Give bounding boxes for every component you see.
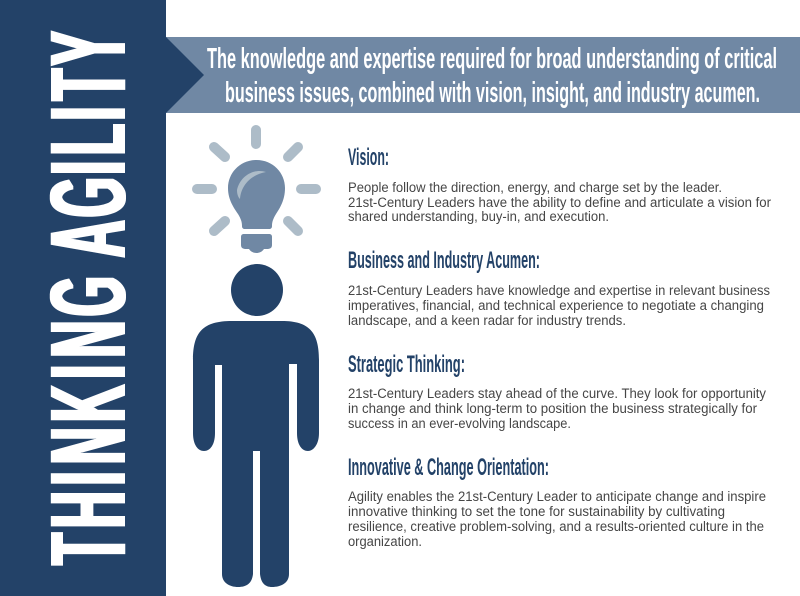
body: Strategic Thinking: success in an ever-evolving landscape. <box>348 416 571 431</box>
bulb highlight <box>237 171 266 199</box>
heading: Strategic Thinking: Strategic Thinking: <box>348 351 465 378</box>
body: Strategic Thinking: in change and think long-term to position the business strategically for <box>348 401 758 416</box>
body: Business and Industry Acumen <box>348 283 770 328</box>
icon: light bulb <box>197 130 316 253</box>
body: Strategic Thinking <box>348 386 766 431</box>
panel: left sidebar <box>0 0 166 596</box>
body: Innovative and Change Orientation <box>348 489 766 549</box>
section: Business and Industry Acumen <box>348 247 770 328</box>
heading: Vision: Vision: <box>348 144 389 171</box>
body: Business and Industry Acumen: imperatives, financial, and technical experience to negotiate a changing <box>348 298 764 313</box>
body: Innovative and Change Orientation: innovative thinking to set the tone for sustainability by cultivating <box>348 504 725 519</box>
body: Vision: 21st-Century Leaders have the ability to define and articulate a vision for <box>348 195 772 210</box>
section: Strategic Thinking <box>348 351 766 431</box>
body: Business and Industry Acumen: 21st-Century Leaders have knowledge and expertise in relevant business <box>348 283 770 298</box>
banner: definition <box>166 37 800 113</box>
icon: light rays <box>197 130 316 231</box>
icon: person <box>193 264 319 587</box>
arrow notch <box>166 37 204 113</box>
body: Business and Industry Acumen: landscape, and a keen radar for industry trends. <box>348 313 626 328</box>
banner text <box>207 43 777 109</box>
section: Vision <box>348 144 772 224</box>
heading: Business and Industry Acumen: Business and Industry Acumen: <box>348 247 540 274</box>
body: Vision: People follow the direction, energy, and charge set by the leader. <box>348 180 722 195</box>
bulb glass <box>228 160 285 229</box>
heading: Innovative and Change Orientation: Innovative & Change Orientation: <box>348 454 549 481</box>
body: Innovative and Change Orientation: Agility enables the 21st-Century Leader to anticipate change and inspire <box>348 489 766 504</box>
body: Vision <box>348 180 772 224</box>
section: Innovative and Change Orientation <box>348 454 766 549</box>
body: Innovative and Change Orientation: resilience, creative problem-solving, and a results-oriented culture in the <box>348 519 764 534</box>
body: Strategic Thinking: 21st-Century Leaders stay ahead of the curve. They look for opportunity <box>348 386 766 401</box>
body: Innovative and Change Orientation: organization. <box>348 534 422 549</box>
title: Thinking Agility: THINKING AGILITY <box>27 31 148 565</box>
body: Vision: shared understanding, buy-in, and execution. <box>348 209 609 224</box>
bulb base <box>241 234 272 253</box>
